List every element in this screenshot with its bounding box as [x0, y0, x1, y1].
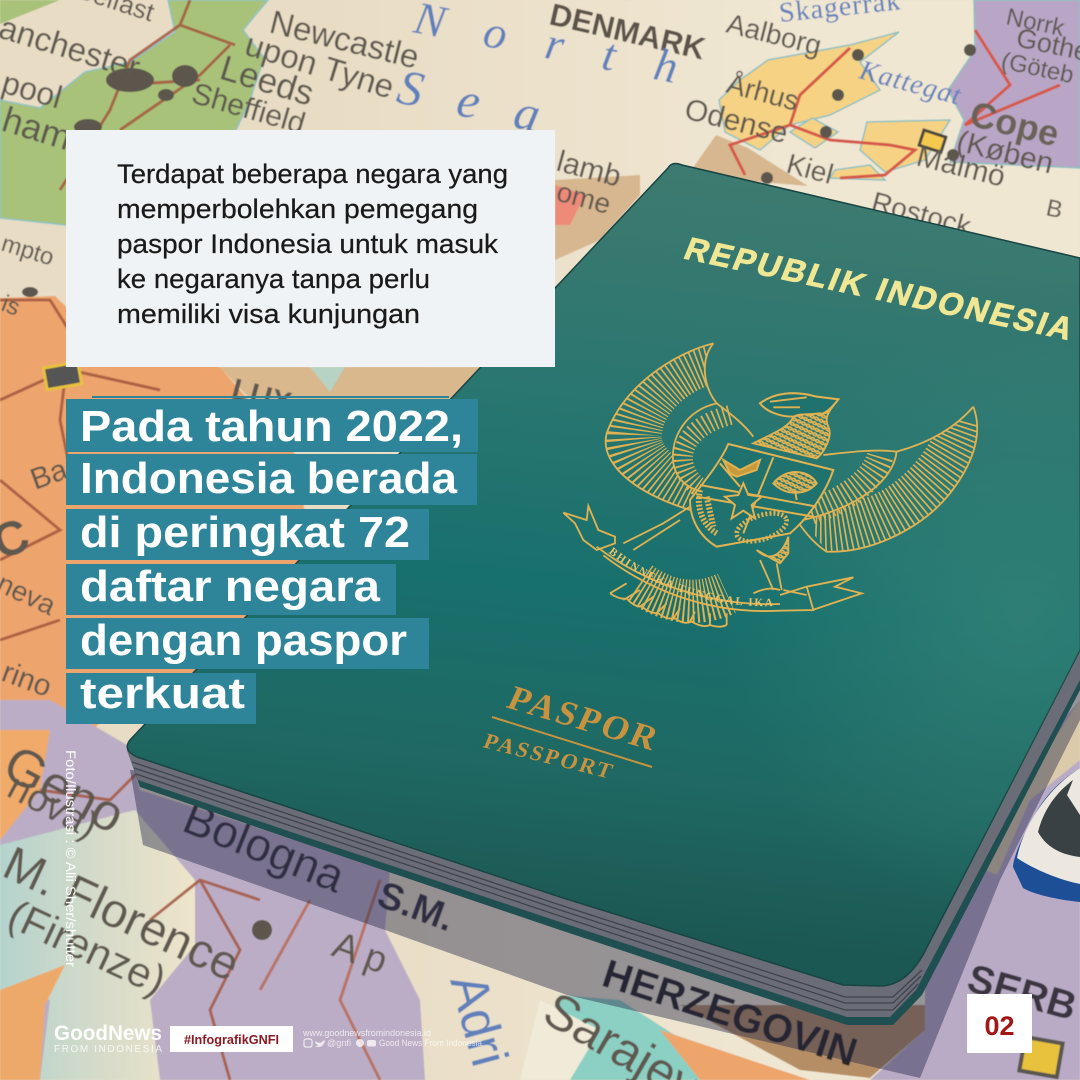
- left wing: [606, 343, 753, 510]
- heading: di peringkat 72: [80, 508, 410, 557]
- map place names: mpto: [0, 230, 57, 271]
- land: Germany tan: [690, 135, 808, 186]
- page number: 02: [984, 1011, 1015, 1041]
- land: Sweden lavender: [948, 0, 1080, 168]
- text panel: intro: [66, 130, 555, 367]
- map place names: Malmö: [913, 140, 1009, 194]
- cities: [22, 44, 976, 940]
- page number: [967, 994, 1032, 1053]
- map place names: B: [1044, 194, 1065, 224]
- heading: Pada tahun 2022,: [80, 402, 463, 451]
- hashtag badge: [170, 1026, 293, 1052]
- map place names: lamb: [553, 145, 625, 194]
- map sea names: Adri: [438, 968, 518, 1072]
- map sea names: Sea: [393, 58, 581, 150]
- map place names: pool: [0, 64, 66, 115]
- map place names: (Køben: [953, 125, 1057, 181]
- land: Denmark yellow: [719, 32, 950, 180]
- motto ribbon: BHINNEKA TUNGGAL IKA: [608, 547, 773, 606]
- land: Britain green: [0, 0, 268, 225]
- map place names: Newcastle: [266, 3, 423, 76]
- map place names: (Göteb: [999, 47, 1076, 89]
- heading: Indonesia berada: [80, 454, 458, 503]
- map place names: upon Tyne: [241, 25, 399, 106]
- tail and legs: [610, 507, 807, 627]
- map place names: Sheffield: [188, 77, 309, 141]
- map place names: LUX.: [228, 373, 303, 422]
- land: France orange: [0, 296, 320, 760]
- footer contact links: www.goodnewsfromindonesia.id: [302, 1028, 431, 1039]
- footer logo: GoodNews: [54, 1022, 162, 1045]
- heading: daftar negara: [80, 562, 381, 611]
- footer contact links: Good News From Indonesia: [379, 1038, 483, 1049]
- photo credit: Foto/Ilustrasi : © Alii Sher/shutter: [63, 750, 78, 968]
- map place names: A p: [327, 924, 393, 982]
- intro paragraph: [117, 159, 508, 329]
- map place names: nova): [1, 766, 104, 848]
- intro paragraph: memiliki visa kunjungan: [117, 299, 420, 329]
- map sea names: Kattegat: [855, 55, 965, 112]
- intro paragraph: memperbolehkan pemegang: [117, 194, 478, 224]
- map place names: Aalborg: [724, 8, 825, 61]
- passport label PASPOR: PASSPORT: [480, 728, 619, 784]
- land: Italy lavender: [0, 700, 425, 1080]
- passport label PASPOR: PASPOR: [502, 679, 667, 758]
- hashtag badge: #InfografikGNFI: [184, 1032, 279, 1047]
- footer contact links: [302, 1028, 483, 1049]
- map place names: ome: [553, 176, 614, 220]
- map place names: ham: [0, 98, 77, 158]
- map place names: Bologna: [176, 791, 353, 903]
- right wing: [797, 407, 977, 552]
- intro paragraph: ke negaranya tanpa perlu: [117, 264, 430, 294]
- heading: terkuat: [80, 669, 245, 718]
- shield: [690, 444, 833, 547]
- heading: dengan paspor: [80, 616, 407, 665]
- footer contact links: @gnfi: [327, 1038, 351, 1049]
- map place names: Odense: [681, 93, 791, 150]
- object at right edge: [1013, 768, 1080, 902]
- map place names: HERZEGOVIN: [597, 952, 862, 1075]
- land: Balkans: [520, 995, 745, 1080]
- motto ribbon: [562, 502, 865, 612]
- map place names: SERB: [963, 956, 1080, 1029]
- head and chest: [753, 393, 838, 458]
- map place names: (Firenze): [1, 891, 173, 1004]
- passport: [126, 162, 1080, 1025]
- garuda emblem: [562, 342, 978, 628]
- passport page block: [127, 640, 1080, 1025]
- map place names: S.M.: [372, 874, 460, 940]
- map place names: Norrk: [1004, 3, 1068, 42]
- passport cover: [127, 164, 1080, 986]
- cover title: REPUBLIK INDONESIA: [679, 231, 1080, 347]
- footer logo: FROM INDONESIA: [54, 1044, 162, 1055]
- map place names: Kiel: [783, 148, 837, 190]
- heading: [66, 396, 478, 724]
- map place names: Århus: [723, 68, 802, 117]
- intro paragraph: paspor Indonesia untuk masuk: [117, 229, 499, 259]
- passport shadow: [130, 640, 1080, 1078]
- footer logo: [54, 1022, 162, 1055]
- intro paragraph: Terdapat beberapa negara yang: [117, 159, 508, 189]
- passport label PASPOR: [480, 679, 667, 784]
- map place names: Cope: [966, 93, 1063, 155]
- rivers and roads: [0, 0, 380, 1080]
- map place names: Leeds: [216, 48, 318, 114]
- map place names: Rostock: [868, 186, 975, 242]
- map place names: M. Florence: [0, 837, 247, 992]
- map sea names: [393, 0, 965, 1072]
- sea: Ligurian: [0, 810, 195, 1080]
- social icons: [304, 1039, 376, 1047]
- map place names: Ba: [26, 453, 72, 497]
